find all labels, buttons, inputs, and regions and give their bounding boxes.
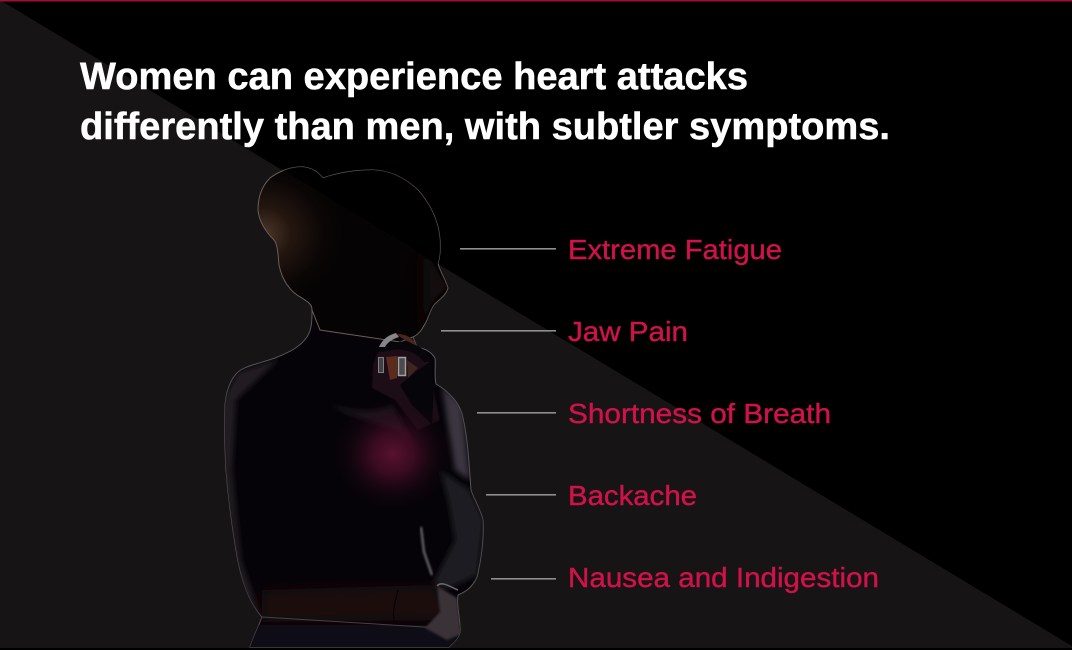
hair darker above the diagonal bbox=[284, 166, 440, 264]
chest glow bbox=[331, 396, 455, 512]
title: Women can experience heart attacks bbox=[80, 56, 748, 98]
symptom: shortness of breath: Shortness of Breath bbox=[568, 398, 831, 429]
symptom: nausea and indigestion: Nausea and Indigestion bbox=[568, 562, 879, 593]
symptom: extreme fatigue: Extreme Fatigue bbox=[568, 234, 782, 265]
face shading bbox=[395, 250, 446, 330]
shading inside torso bbox=[222, 358, 484, 650]
hand at throat bbox=[372, 333, 440, 430]
silhouette of woman with chest glow bbox=[222, 167, 484, 650]
title: differently than men, with subtler symptoms. bbox=[80, 106, 890, 148]
title bbox=[80, 56, 890, 148]
symptom: jaw pain: Jaw Pain bbox=[568, 316, 688, 347]
head and hair bbox=[258, 167, 448, 342]
symptom: backache: Backache bbox=[568, 480, 697, 511]
top accent bar bbox=[0, 0, 1072, 2]
torso and arms bbox=[225, 300, 483, 647]
